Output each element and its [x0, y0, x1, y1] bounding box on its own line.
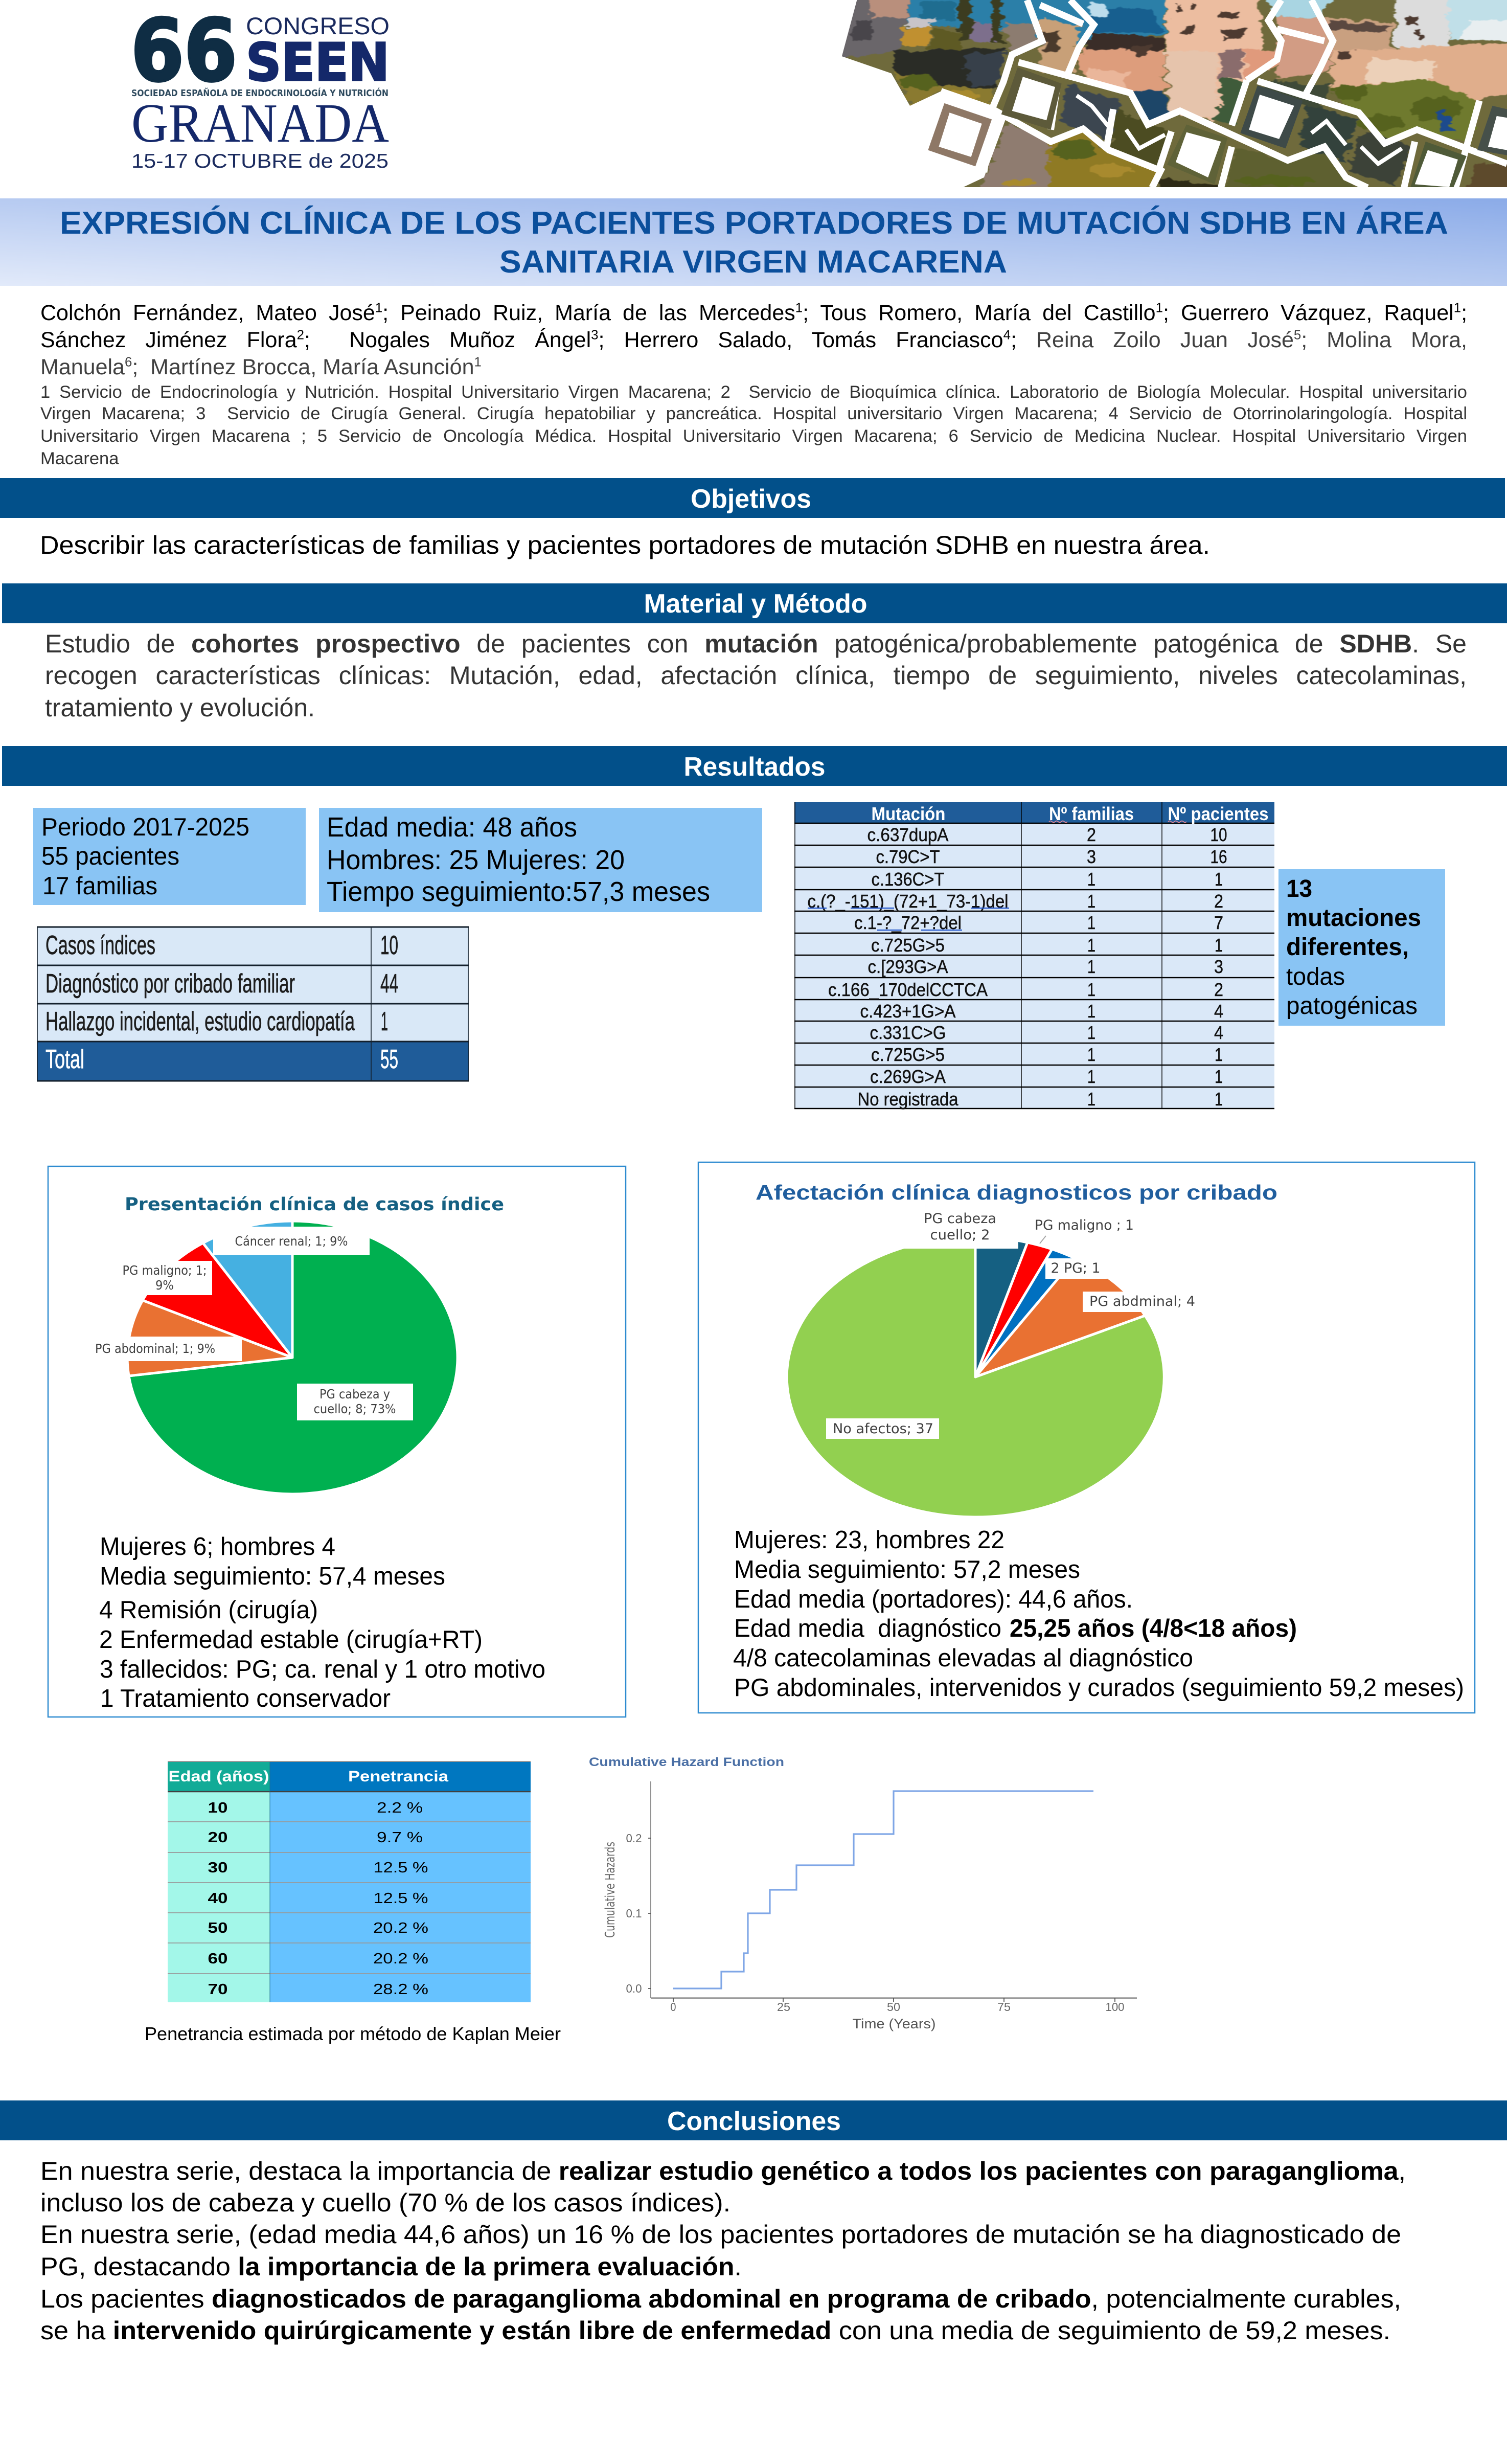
chart title: Afectación clínica diagnosticos por cribado: [756, 1181, 1277, 1204]
table: casos: 55: [380, 1045, 398, 1074]
panel text: PG abdominales, intervenidos y curados (seguimiento 59,2 meses): [734, 1674, 1464, 1702]
panel text: Media seguimiento: 57,2 meses: [734, 1556, 1080, 1584]
panel text: Edad media (portadores): 44,6 años.: [734, 1586, 1133, 1613]
table: mutaciones: 1: [1087, 935, 1095, 956]
table: mutaciones: 1: [1087, 1089, 1095, 1110]
chart: cumulative hazard: 75: [997, 2000, 1011, 2014]
table: casos: Total: [45, 1045, 84, 1074]
table: penetrancia: 12.5 %: [373, 1860, 428, 1876]
table: mutaciones: Mutación: [871, 803, 946, 824]
conclusions text: Los pacientes diagnosticados de paraganglioma abdominal en programa de cribado , potencialmente curables,: [40, 2285, 1401, 2313]
authors: [40, 301, 1467, 379]
chart: cumulative hazard: Cumulative Hazard Function: [589, 1755, 784, 1769]
conclusions text: En nuestra serie, destaca la importancia de realizar estudio genético a todos los pacientes con paraganglioma ,: [40, 2157, 1406, 2185]
table: mutaciones: Nº pacientes: [1168, 803, 1269, 824]
table: mutaciones: [794, 802, 1274, 1110]
table: mutaciones: 1: [1087, 1001, 1095, 1022]
congress logo: 15-17 OCTUBRE de 2025: [131, 150, 389, 172]
title band: [0, 198, 1507, 286]
affiliations: 1 Servicio de Endocrinología y Nutrición. Hospital Universitario Virgen Macarena; 2 Servicio de Bioquímica clínica. Laboratorio de Biología Molecular. Hospital universitario: [40, 382, 1467, 402]
table: mutaciones: 1: [1087, 1066, 1095, 1087]
summary box: periodo: 55 pacientes: [41, 843, 179, 870]
table: penetrancia: [168, 1761, 531, 2002]
table: casos: Hallazgo incidental, estudio cardiopatía: [45, 1007, 355, 1036]
table: mutaciones: 7: [1214, 912, 1223, 933]
caption: Kaplan Meier: Penetrancia estimada por método de Kaplan Meier: [145, 2023, 561, 2044]
pie chart: presentacion: [127, 1221, 458, 1494]
table: mutaciones: 1: [1215, 935, 1223, 956]
pie label: PG cabeza y cuello: [297, 1384, 413, 1420]
summary box: periodo: 17 familias: [42, 872, 157, 900]
table: penetrancia: 9.7 %: [377, 1829, 423, 1846]
congress logo: GRANADA: [131, 93, 389, 154]
congress logo: SEEN: [246, 32, 390, 93]
congress logo: 66: [131, 2, 237, 101]
table: mutaciones: 3: [1214, 956, 1223, 977]
table: mutaciones: 10: [1211, 824, 1227, 845]
affiliations: Universitario Virgen Macarena ; 5 Servicio de Oncología Médica. Hospital Universitario Virgen Macarena; 6 Servicio de Medicina Nuclear. Hospital Universitario Virgen: [40, 426, 1467, 446]
table: mutaciones: c.725G>5: [871, 1044, 945, 1065]
panel text: 2 Enfermedad estable (cirugía+RT): [99, 1626, 483, 1654]
table: casos: Casos índices: [45, 931, 155, 960]
table: mutaciones: c.269G>A: [870, 1066, 946, 1087]
chart: cumulative hazard: Time (Years): [853, 2016, 935, 2031]
congress logo: [131, 2, 390, 172]
panel text: 4/8 catecolaminas elevadas al diagnóstico: [733, 1644, 1193, 1672]
panel text: [733, 1526, 1464, 1702]
panel text: Mujeres 6; hombres 4: [100, 1533, 335, 1561]
table: mutaciones: c.136C>T: [871, 869, 945, 890]
summary box: periodo: Periodo 2017-2025: [41, 813, 249, 841]
authors: Manuela6; Martínez Brocca, María Asunción1: [40, 355, 482, 379]
table: mutaciones: c.166_170delCCTCA: [828, 979, 988, 1000]
pie label: PG cabeza y cuello: PG cabeza y: [319, 1387, 390, 1401]
conclusions text: En nuestra serie, (edad media 44,6 años) un 16 % de los pacientes portadores de mutación se ha diagnosticado de: [40, 2220, 1401, 2249]
pie label: PG abdominal: PG abdminal; 4: [1089, 1294, 1195, 1309]
table: mutaciones: 2: [1087, 824, 1096, 845]
chart: cumulative hazard: 100: [1105, 2000, 1125, 2014]
table: penetrancia: 12.5 %: [373, 1890, 428, 1907]
table: mutaciones: 1: [1215, 1044, 1223, 1065]
table: mutaciones: 1: [1087, 891, 1095, 912]
affiliations: Virgen Macarena; 3 Servicio de Cirugía General. Cirugía hepatobiliar y pancreática. Hospital universitario Virgen Macarena; 4 Servicio de Otorrinolaringología. Hospital: [40, 404, 1467, 423]
chart: cumulative hazard: 0.2: [626, 1832, 642, 1845]
methods text: Estudio de cohortes prospectivo de pacientes con mutación patogénica/probablemente patogénica de SDHB. Se: [45, 629, 1467, 658]
pie label: PG cabeza y cuello: cuello; 8; 73%: [314, 1401, 396, 1416]
pie label: PG cabeza cuello: [902, 1211, 1018, 1249]
panel text: Edad media diagnóstico: [734, 1615, 1001, 1642]
table: mutaciones: c.[293G>A: [868, 956, 948, 977]
conclusions text: PG, destacando la importancia de la primera evaluación .: [40, 2252, 742, 2281]
callout: 13 mutaciones: patogénicas: [1286, 992, 1418, 1020]
callout: 13 mutaciones: [1278, 869, 1445, 1026]
pie label: cancer renal: Cáncer renal; 1; 9%: [235, 1234, 348, 1249]
callout: 13 mutaciones: mutaciones: [1286, 905, 1421, 932]
chart: cumulative hazard: [589, 1755, 1137, 2031]
title band: EXPRESIÓN CLÍNICA DE LOS PACIENTES PORTADORES DE MUTACIÓN SDHB EN ÁREA: [60, 206, 1448, 241]
pie label: No afectos: [826, 1418, 939, 1439]
methods text: [45, 629, 1467, 722]
conclusions text: [40, 2157, 1406, 2345]
pie label: PG maligno: [1035, 1217, 1134, 1244]
callout: 13 mutaciones: 13: [1286, 875, 1312, 902]
panel text: [99, 1533, 545, 1712]
chart: cumulative hazard: 25: [777, 2000, 790, 2014]
table: mutaciones: 3: [1087, 846, 1096, 867]
table: penetrancia: 40: [208, 1890, 228, 1907]
table: mutaciones: 2: [1214, 979, 1223, 1000]
heading: Objetivos: Objetivos: [691, 484, 811, 514]
table: penetrancia: 10: [208, 1800, 228, 1816]
chart: cumulative hazard: 50: [887, 2000, 900, 2014]
table: casos: 1: [381, 1007, 388, 1036]
summary box: periodo: [33, 808, 306, 905]
table: mutaciones: 4: [1214, 1022, 1223, 1043]
objectives text: Describir las características de familias y pacientes portadores de mutación SDHB en nuestra área.: [40, 531, 1210, 559]
table: mutaciones: c.79C>T: [876, 846, 940, 867]
table: mutaciones: 1: [1087, 979, 1095, 1000]
table: penetrancia: 30: [208, 1860, 228, 1876]
authors: Sánchez Jiménez Flora2; Nogales Muñoz Ángel3; Herrero Salado, Tomás Franciasco4; Reina Zoilo Juan José5; Molina Mora,: [40, 328, 1467, 352]
panel text: Mujeres: 23, hombres 22: [734, 1526, 1004, 1554]
chart: cumulative hazard: Cumulative Hazards: [603, 1842, 618, 1938]
affiliations: Macarena: [40, 449, 119, 468]
pie label: PG maligno: PG maligno ; 1: [1035, 1217, 1134, 1233]
table: penetrancia: 28.2 %: [373, 1981, 428, 1998]
table: mutaciones: 1: [1087, 1044, 1095, 1065]
table: mutaciones: c.423+1G>A: [860, 1001, 956, 1022]
heading: Conclusiones: Conclusiones: [667, 2107, 841, 2136]
table: mutaciones: 4: [1214, 1001, 1223, 1022]
table: mutaciones: 16: [1211, 846, 1227, 867]
table: mutaciones: 1: [1087, 869, 1095, 890]
table: penetrancia: 20.2 %: [373, 1951, 428, 1967]
pie label: PG maligno: [121, 1261, 212, 1295]
methods text: tratamiento y evolución.: [45, 693, 315, 722]
panel: cribado: [698, 1162, 1475, 1713]
congress logo: SOCIEDAD ESPAÑOLA DE ENDOCRINOLOGÍA Y NUTRICIÓN: [131, 87, 389, 99]
callout: 13 mutaciones: todas: [1286, 963, 1345, 990]
heading: Resultados: Resultados: [684, 752, 825, 782]
header image: Alhambra painting with geometric frame: [841, 0, 1507, 187]
summary box: edad: Tiempo seguimiento:57,3 meses: [327, 876, 710, 907]
pie label: PG cabeza cuello: PG cabeza: [924, 1211, 996, 1227]
heading: Resultados: [2, 746, 1507, 786]
panel text: Media seguimiento: 57,4 meses: [100, 1563, 445, 1590]
pie label: 2 PG: 2 PG; 1: [1051, 1260, 1100, 1276]
heading: Material y Método: Material y Método: [644, 589, 867, 619]
affiliations: [40, 382, 1467, 468]
authors: Colchón Fernández, Mateo José1; Peinado Ruiz, María de las Mercedes1; Tous Romero, María del Castillo1; Guerrero Vázquez, Raquel1;: [40, 301, 1467, 325]
conclusions text: se ha intervenido quirúrgicamente y están libre de enfermedad con una media de seguimiento de 59,2 meses.: [40, 2316, 1390, 2345]
table: mutaciones: 1: [1087, 912, 1095, 933]
pie label: PG maligno: 9%: [155, 1278, 174, 1293]
table: mutaciones: No registrada: [858, 1089, 958, 1110]
heading: Conclusiones: [0, 2100, 1507, 2140]
table: mutaciones: 1: [1087, 1022, 1095, 1043]
table: mutaciones: 1: [1087, 956, 1095, 977]
table: casos: Diagnóstico por cribado familiar: [45, 969, 295, 999]
pie label: 2 PG: [1045, 1258, 1107, 1279]
table: mutaciones: 1: [1215, 1066, 1223, 1087]
panel text: 1 Tratamiento conservador: [100, 1685, 391, 1712]
table: mutaciones: c.331C>G: [870, 1022, 946, 1043]
table: casos: [37, 927, 469, 1081]
callout: 13 mutaciones: diferentes,: [1286, 934, 1409, 961]
table: penetrancia: 70: [208, 1981, 228, 1998]
table: casos: 10: [380, 931, 398, 960]
summary box: edad: Edad media: 48 años: [327, 812, 577, 843]
table: penetrancia: Edad (años): [169, 1768, 269, 1785]
panel: casos indice: [48, 1166, 626, 1717]
table: casos: 44: [380, 969, 398, 999]
pie label: PG abdominal: PG abdominal; 1; 9%: [95, 1341, 215, 1356]
table: mutaciones: Nº familias: [1049, 803, 1134, 824]
chart title: Presentación clínica de casos índice: [125, 1194, 504, 1215]
table: penetrancia: Penetrancia: [348, 1768, 448, 1785]
pie label: No afectos: No afectos; 37: [833, 1421, 933, 1437]
congress logo: CONGRESO: [246, 12, 390, 39]
conclusions text: incluso los de cabeza y cuello (70 % de los casos índices).: [40, 2188, 730, 2217]
table: penetrancia: 20.2 %: [373, 1920, 428, 1936]
chart: cumulative hazard: 0.1: [626, 1907, 642, 1920]
panel text: 3 fallecidos: PG; ca. renal y 1 otro motivo: [100, 1656, 545, 1683]
table: mutaciones: c.637dupA: [867, 824, 949, 845]
table: mutaciones: c.725G>5: [871, 935, 945, 956]
pie label: cancer renal: [213, 1227, 370, 1255]
table: mutaciones: c.(?_-151)_(72+1_73-1)del: [808, 891, 1008, 912]
table: penetrancia: 20: [208, 1829, 228, 1846]
chart: cumulative hazard: 0: [671, 2000, 676, 2014]
summary box: edad: Hombres: 25 Mujeres: 20: [327, 845, 625, 875]
table: penetrancia: 2.2 %: [377, 1800, 423, 1816]
heading: Objetivos: [0, 478, 1505, 518]
table: penetrancia: 60: [208, 1951, 228, 1967]
panel text: 4 Remisión (cirugía): [99, 1596, 318, 1624]
title band: SANITARIA VIRGEN MACARENA: [499, 244, 1007, 280]
pie label: PG cabeza cuello: cuello; 2: [930, 1227, 990, 1243]
pie label: PG maligno: PG maligno; 1;: [123, 1263, 207, 1278]
table: mutaciones: 2: [1214, 891, 1223, 912]
table: penetrancia: 50: [208, 1920, 228, 1936]
methods text: recogen características clínicas: Mutación, edad, afectación clínica, tiempo de seguimiento, niveles catecolaminas,: [45, 661, 1467, 690]
table: mutaciones: c.1-?_72+?del: [854, 912, 962, 933]
pie label: PG abdominal: [89, 1337, 242, 1361]
chart: cumulative hazard: 0.0: [626, 1982, 642, 1995]
panel text: 25,25 años (4/8<18 años): [1010, 1615, 1297, 1642]
table: mutaciones: 1: [1215, 869, 1223, 890]
heading: Material y Método: [2, 583, 1507, 623]
pie chart: afectacion: [787, 1237, 1164, 1517]
table: mutaciones: 1: [1215, 1089, 1223, 1110]
summary box: edad: [319, 808, 762, 912]
